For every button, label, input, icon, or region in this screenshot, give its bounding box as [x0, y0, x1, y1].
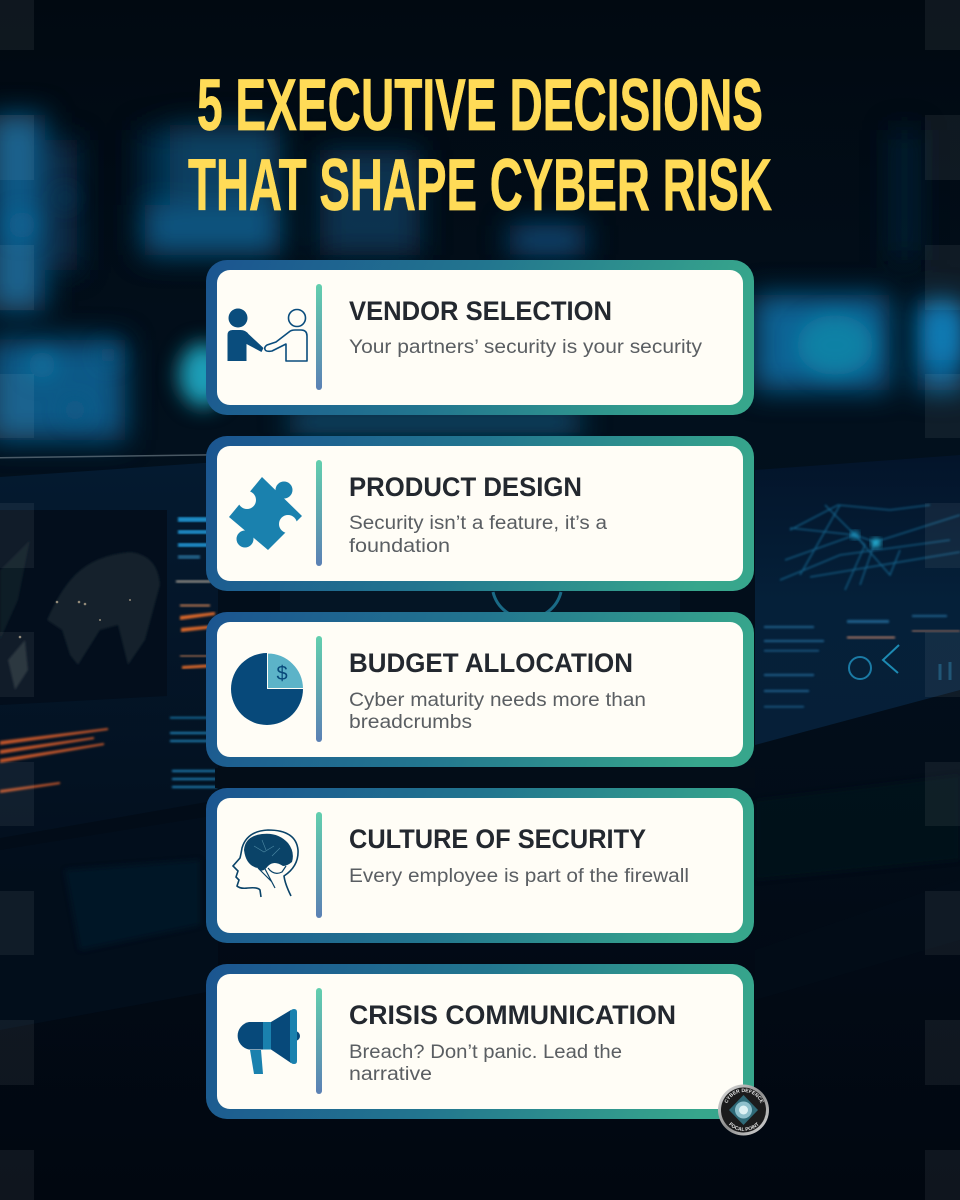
badge: cyber defence focal point: FOCAL POINT [729, 1122, 758, 1131]
icon: pie chart with dollar [231, 653, 304, 725]
panel: product design: foundation [349, 536, 450, 557]
panel: crisis communication: Breach? Don’t panic. Lead the [349, 1042, 622, 1063]
desk and lower area [0, 775, 960, 1030]
badge: cyber defence focal point: CYBER DEFENCE [724, 1088, 764, 1104]
panel: crisis communication: CRISIS COMMUNICATION [349, 1000, 676, 1030]
panel: culture of security: Every employee is part of the firewall [349, 866, 689, 887]
left monitor [0, 454, 218, 838]
title [188, 65, 772, 226]
panel: crisis communication [206, 964, 754, 1119]
badge: cyber defence focal point [718, 1084, 769, 1136]
panel: vendor selection [206, 260, 754, 415]
panel: product design: Security isn’t a feature, it’s a [349, 513, 607, 534]
panel: budget allocation [206, 612, 754, 767]
panel: budget allocation: breadcrumbs [349, 712, 472, 733]
panel: budget allocation: Cyber maturity needs more than [349, 690, 646, 711]
icon: pie chart with dollar: $ [276, 663, 288, 685]
blurred screens, upper area [0, 115, 960, 440]
panel: vendor selection: VENDOR SELECTION [349, 296, 612, 326]
panel: product design [206, 436, 754, 591]
panel: culture of security: CULTURE OF SECURITY [349, 824, 646, 854]
icon: megaphone [238, 1009, 300, 1074]
panel: culture of security [206, 788, 754, 943]
panel: budget allocation: BUDGET ALLOCATION [349, 648, 633, 678]
icon: handshake [228, 308, 307, 361]
icon: puzzle piece [229, 477, 302, 550]
panel: crisis communication: narrative [349, 1064, 432, 1085]
center monitors between cards [215, 590, 755, 788]
panel: vendor selection: Your partners’ security is your security [349, 337, 703, 358]
panel: product design: PRODUCT DESIGN [349, 472, 582, 502]
icon: head with brain [233, 830, 298, 897]
right monitor [755, 455, 960, 745]
